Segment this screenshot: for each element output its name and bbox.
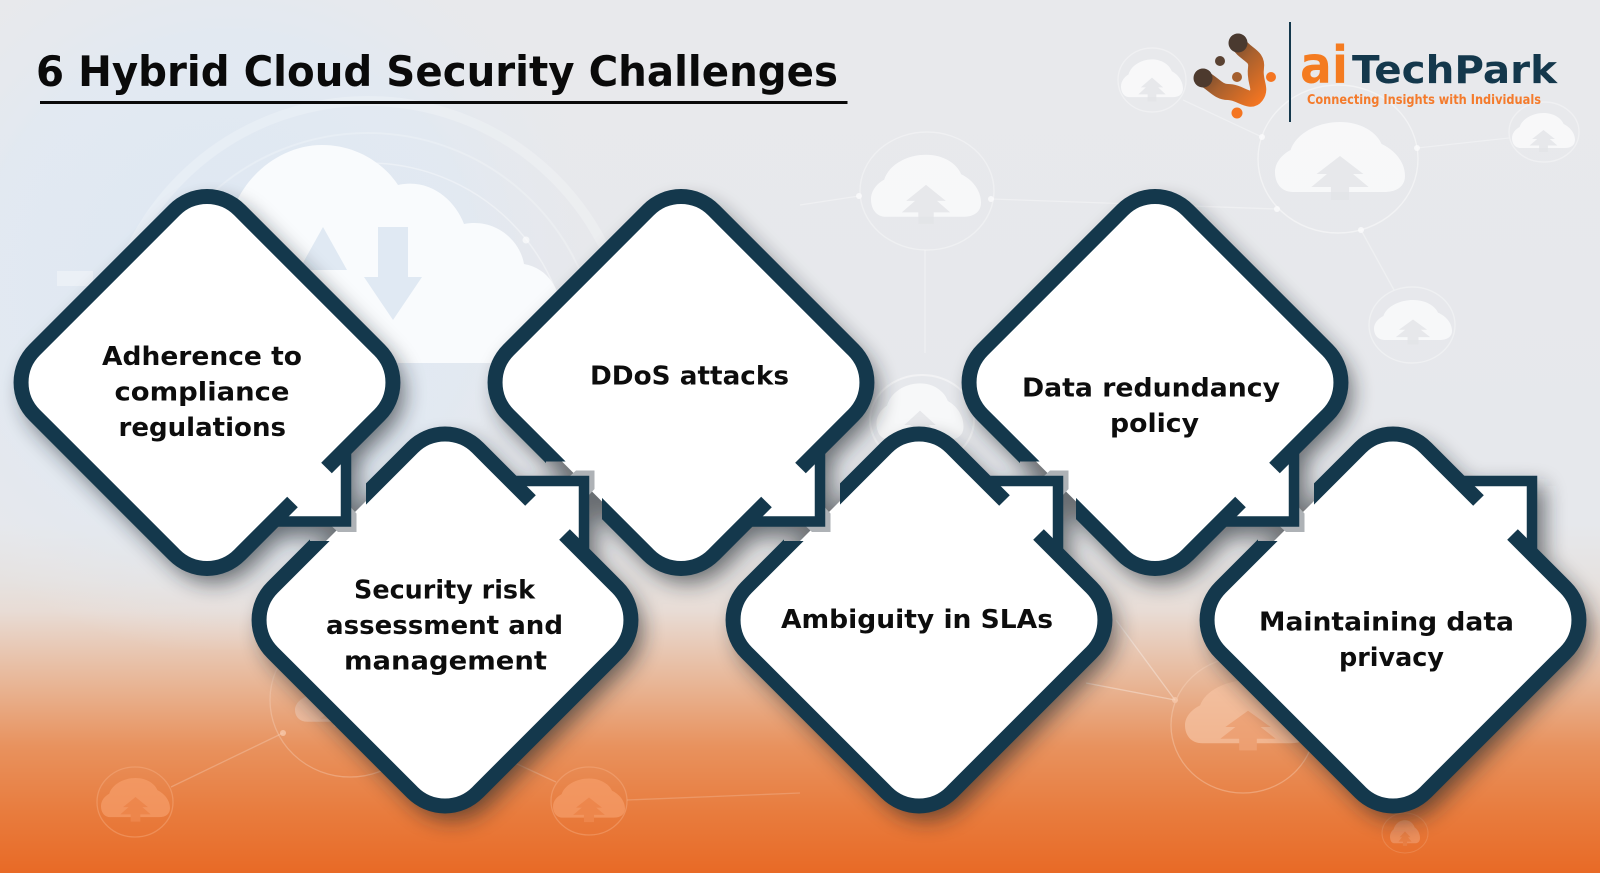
label: Maintaining data privacy: Maintaining data	[1259, 608, 1514, 638]
label: Maintaining data privacy	[1259, 608, 1514, 673]
panel: DDoS attacks	[495, 197, 867, 568]
label: Security risk assessment and management: Security risk	[354, 576, 536, 606]
label: Adherence to compliance regulations	[102, 342, 302, 443]
label: DDoS attacks: DDoS attacks	[590, 362, 789, 392]
label: Ambiguity in SLAs: Ambiguity in SLAs	[781, 605, 1053, 635]
panel: Data redundancy policy	[969, 197, 1341, 568]
label: Data redundancy policy	[1022, 374, 1280, 439]
title: 6 Hybrid Cloud Security Challenges	[36, 47, 838, 96]
label: Adherence to compliance regulations: regulations	[118, 413, 286, 443]
background: clouds in orange zone	[97, 623, 1428, 853]
label: Adherence to compliance regulations: compliance	[114, 378, 290, 408]
label: Security risk assessment and management: management	[344, 646, 547, 676]
panel: Ambiguity in SLAs	[733, 434, 1105, 806]
panel: Maintaining data privacy	[1207, 434, 1579, 806]
diamond drop shadows	[24, 203, 1590, 820]
icon: molecule mark	[1194, 34, 1276, 118]
background blue glow	[0, 0, 800, 650]
label: Data redundancy policy: Data redundancy	[1022, 374, 1280, 404]
label: Security risk assessment and management: assessment and	[326, 611, 563, 641]
background: large cloud with arrows and rings	[57, 145, 556, 363]
logo divider	[1289, 22, 1291, 122]
label: Data redundancy policy: policy	[1110, 409, 1199, 439]
label: Maintaining data privacy: privacy	[1339, 643, 1444, 673]
background: small clouds top right	[856, 48, 1579, 465]
logo wordmark: ai: ai	[1300, 36, 1348, 96]
logo wordmark: TechPark: TechPark	[1352, 48, 1558, 92]
panel: Security risk assessment and management	[259, 434, 631, 806]
label: Security risk assessment and management	[326, 576, 563, 676]
panel: Adherence to compliance regulations	[21, 197, 393, 568]
logo: aiTechPark	[1194, 22, 1558, 122]
title underline	[40, 101, 848, 104]
background: network lines	[171, 100, 1509, 800]
label: Adherence to compliance regulations: Adherence to	[102, 342, 302, 372]
logo tagline: Connecting Insights with Individuals	[1307, 93, 1541, 108]
